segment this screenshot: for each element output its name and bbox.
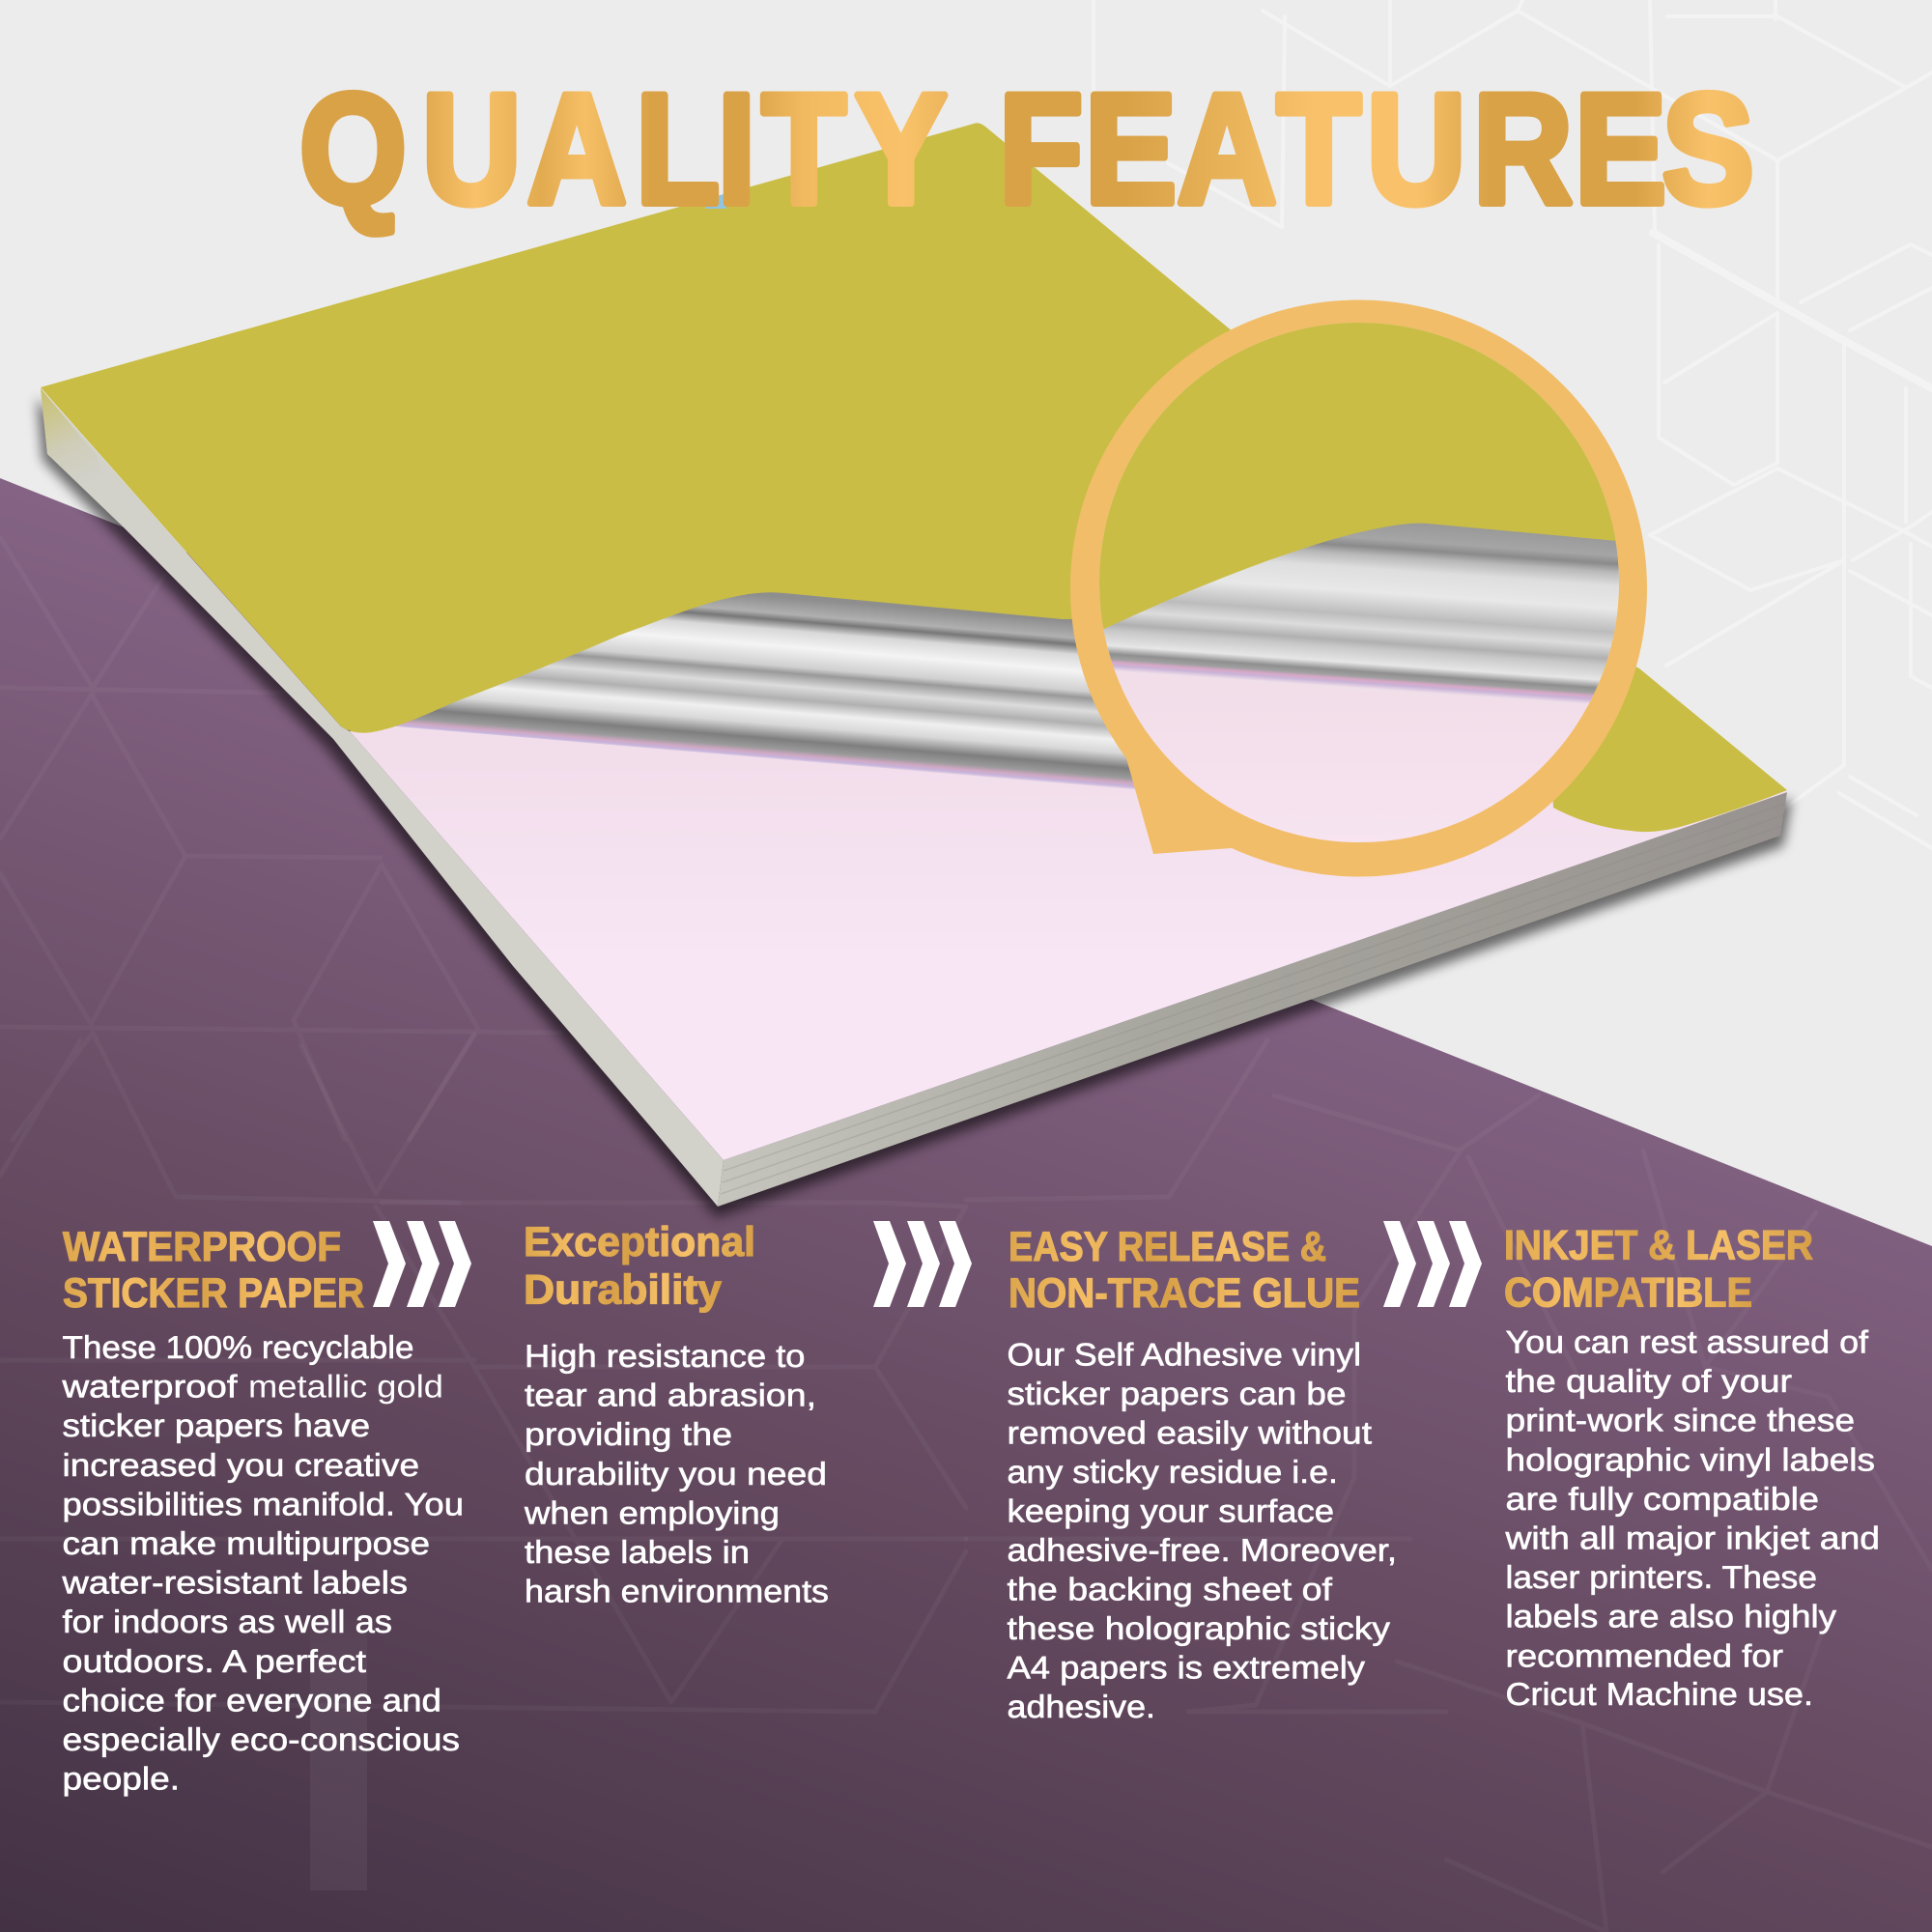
text: easy release description: adhesive. bbox=[1007, 1689, 1155, 1724]
chevrons: third bbox=[1383, 1221, 1482, 1307]
text: waterproof description: increased you creative bbox=[62, 1447, 419, 1483]
heading: exceptional durability: Durability bbox=[524, 1267, 722, 1314]
heading: waterproof sticker paper: STICKER PAPER bbox=[63, 1270, 364, 1317]
text: waterproof description: possibilities manifold. You bbox=[62, 1486, 464, 1521]
stack right side face bbox=[718, 792, 1787, 1207]
magnifier ring and tail bbox=[1070, 299, 1647, 877]
heading: inkjet and laser compatible: INKJET & LASER bbox=[1504, 1223, 1813, 1269]
blue foil sliver bbox=[705, 193, 726, 209]
heading: easy release and non-trace glue bbox=[1009, 1224, 1360, 1317]
chevrons: first bbox=[373, 1221, 471, 1307]
title: QUALITY bbox=[299, 62, 947, 237]
gold sticker flap: right bbox=[1546, 618, 1787, 832]
text: easy release description: adhesive-free. Moreover, bbox=[1007, 1532, 1397, 1568]
text: easy release description bbox=[1007, 1337, 1397, 1724]
text: durability description: High resistance to bbox=[525, 1338, 806, 1374]
text: inkjet and laser description: with all major inkjet and bbox=[1504, 1520, 1880, 1555]
stack left corner tint bbox=[41, 388, 120, 524]
text: waterproof description: outdoors. A perfect bbox=[62, 1643, 366, 1679]
column: easy release and non-trace glue bbox=[1007, 1224, 1397, 1724]
text: inkjet and laser description: laser printers. These bbox=[1505, 1559, 1817, 1595]
text: waterproof description: people. bbox=[62, 1761, 180, 1797]
text: durability description: providing the bbox=[525, 1416, 732, 1452]
text: easy release description: any sticky residue i.e. bbox=[1007, 1454, 1338, 1490]
text: waterproof description: metallic gold bbox=[248, 1369, 443, 1405]
title: FEATURES bbox=[999, 62, 1754, 237]
stack page lines bbox=[721, 804, 1785, 1194]
text: inkjet and laser description: holographic vinyl labels bbox=[1505, 1441, 1875, 1477]
heading: exceptional durability bbox=[524, 1219, 755, 1314]
hexagon pattern: top right bbox=[1094, 0, 1932, 848]
text: durability description: durability you need bbox=[525, 1456, 827, 1492]
text: easy release description: A4 papers is extremely bbox=[1007, 1650, 1366, 1685]
text: waterproof description: sticker papers have bbox=[62, 1407, 370, 1443]
chevrons: second bbox=[873, 1221, 972, 1307]
text: waterproof description bbox=[61, 1329, 464, 1797]
text: inkjet and laser description bbox=[1504, 1323, 1880, 1712]
hexagon pattern: purple panel bbox=[301, 1032, 968, 1890]
text: inkjet and laser description: print-work since these bbox=[1505, 1403, 1855, 1438]
stack shadow bbox=[37, 398, 1792, 1217]
heading: exceptional durability: Exceptional bbox=[524, 1219, 755, 1265]
text: waterproof description: water-resistant labels bbox=[61, 1565, 408, 1601]
text: durability description: these labels in bbox=[525, 1534, 750, 1570]
heading: waterproof sticker paper bbox=[63, 1224, 364, 1317]
text: durability description: tear and abrasion, bbox=[525, 1378, 816, 1413]
text: easy release description: removed easily without bbox=[1007, 1414, 1372, 1451]
column: inkjet and laser compatible bbox=[1504, 1223, 1880, 1712]
text: inkjet and laser description: labels are also highly bbox=[1505, 1599, 1837, 1634]
text: easy release description: the backing sheet of bbox=[1007, 1571, 1333, 1607]
heading: inkjet and laser compatible bbox=[1504, 1223, 1813, 1316]
purple diagonal background panel bbox=[0, 478, 1932, 1932]
text: durability description: harsh environments bbox=[525, 1574, 829, 1609]
text: waterproof description: waterproof bbox=[61, 1369, 238, 1405]
gold sticker flap: main bbox=[41, 123, 1256, 733]
text: inkjet and laser description: are fully compatible bbox=[1505, 1481, 1819, 1517]
text: waterproof description: can make multipurpose bbox=[62, 1525, 430, 1561]
heading: easy release and non-trace glue: EASY RELEASE & bbox=[1009, 1224, 1326, 1270]
title bbox=[299, 62, 1754, 237]
text: easy release description: Our Self Adhesive vinyl bbox=[1007, 1337, 1361, 1372]
text: durability description: when employing bbox=[524, 1494, 780, 1530]
text: waterproof description: choice for everyone and bbox=[62, 1682, 441, 1718]
text: inkjet and laser description: recommended for bbox=[1505, 1637, 1783, 1673]
heading: easy release and non-trace glue: NON-TRACE GLUE bbox=[1009, 1270, 1360, 1317]
text: inkjet and laser description: the quality of your bbox=[1505, 1363, 1792, 1399]
column: exceptional durability bbox=[524, 1219, 829, 1609]
silver adhesive strip bbox=[386, 580, 1256, 800]
heading: inkjet and laser compatible: COMPATIBLE bbox=[1504, 1269, 1752, 1316]
sticker paper stack bbox=[37, 123, 1792, 1217]
stack left side face bbox=[41, 388, 724, 1207]
text: easy release description: sticker papers can be bbox=[1007, 1376, 1347, 1411]
heading: waterproof sticker paper: WATERPROOF bbox=[63, 1224, 341, 1270]
text: easy release description: keeping your surface bbox=[1007, 1493, 1334, 1528]
text: waterproof description: especially eco-conscious bbox=[62, 1721, 460, 1757]
text: inkjet and laser description: Cricut Machine use. bbox=[1505, 1676, 1813, 1712]
magnifier callout bbox=[1070, 299, 1647, 877]
text: inkjet and laser description: You can rest assured of bbox=[1505, 1323, 1869, 1360]
pink backing sheet bbox=[350, 618, 1787, 1160]
text: easy release description: these holographic sticky bbox=[1007, 1610, 1391, 1646]
text: durability description bbox=[524, 1338, 829, 1609]
magnified view bbox=[1082, 319, 1642, 850]
text: waterproof description: for indoors as well as bbox=[62, 1604, 392, 1639]
column: waterproof sticker paper bbox=[61, 1224, 464, 1797]
text: waterproof description: These 100% recyclable bbox=[62, 1329, 413, 1365]
